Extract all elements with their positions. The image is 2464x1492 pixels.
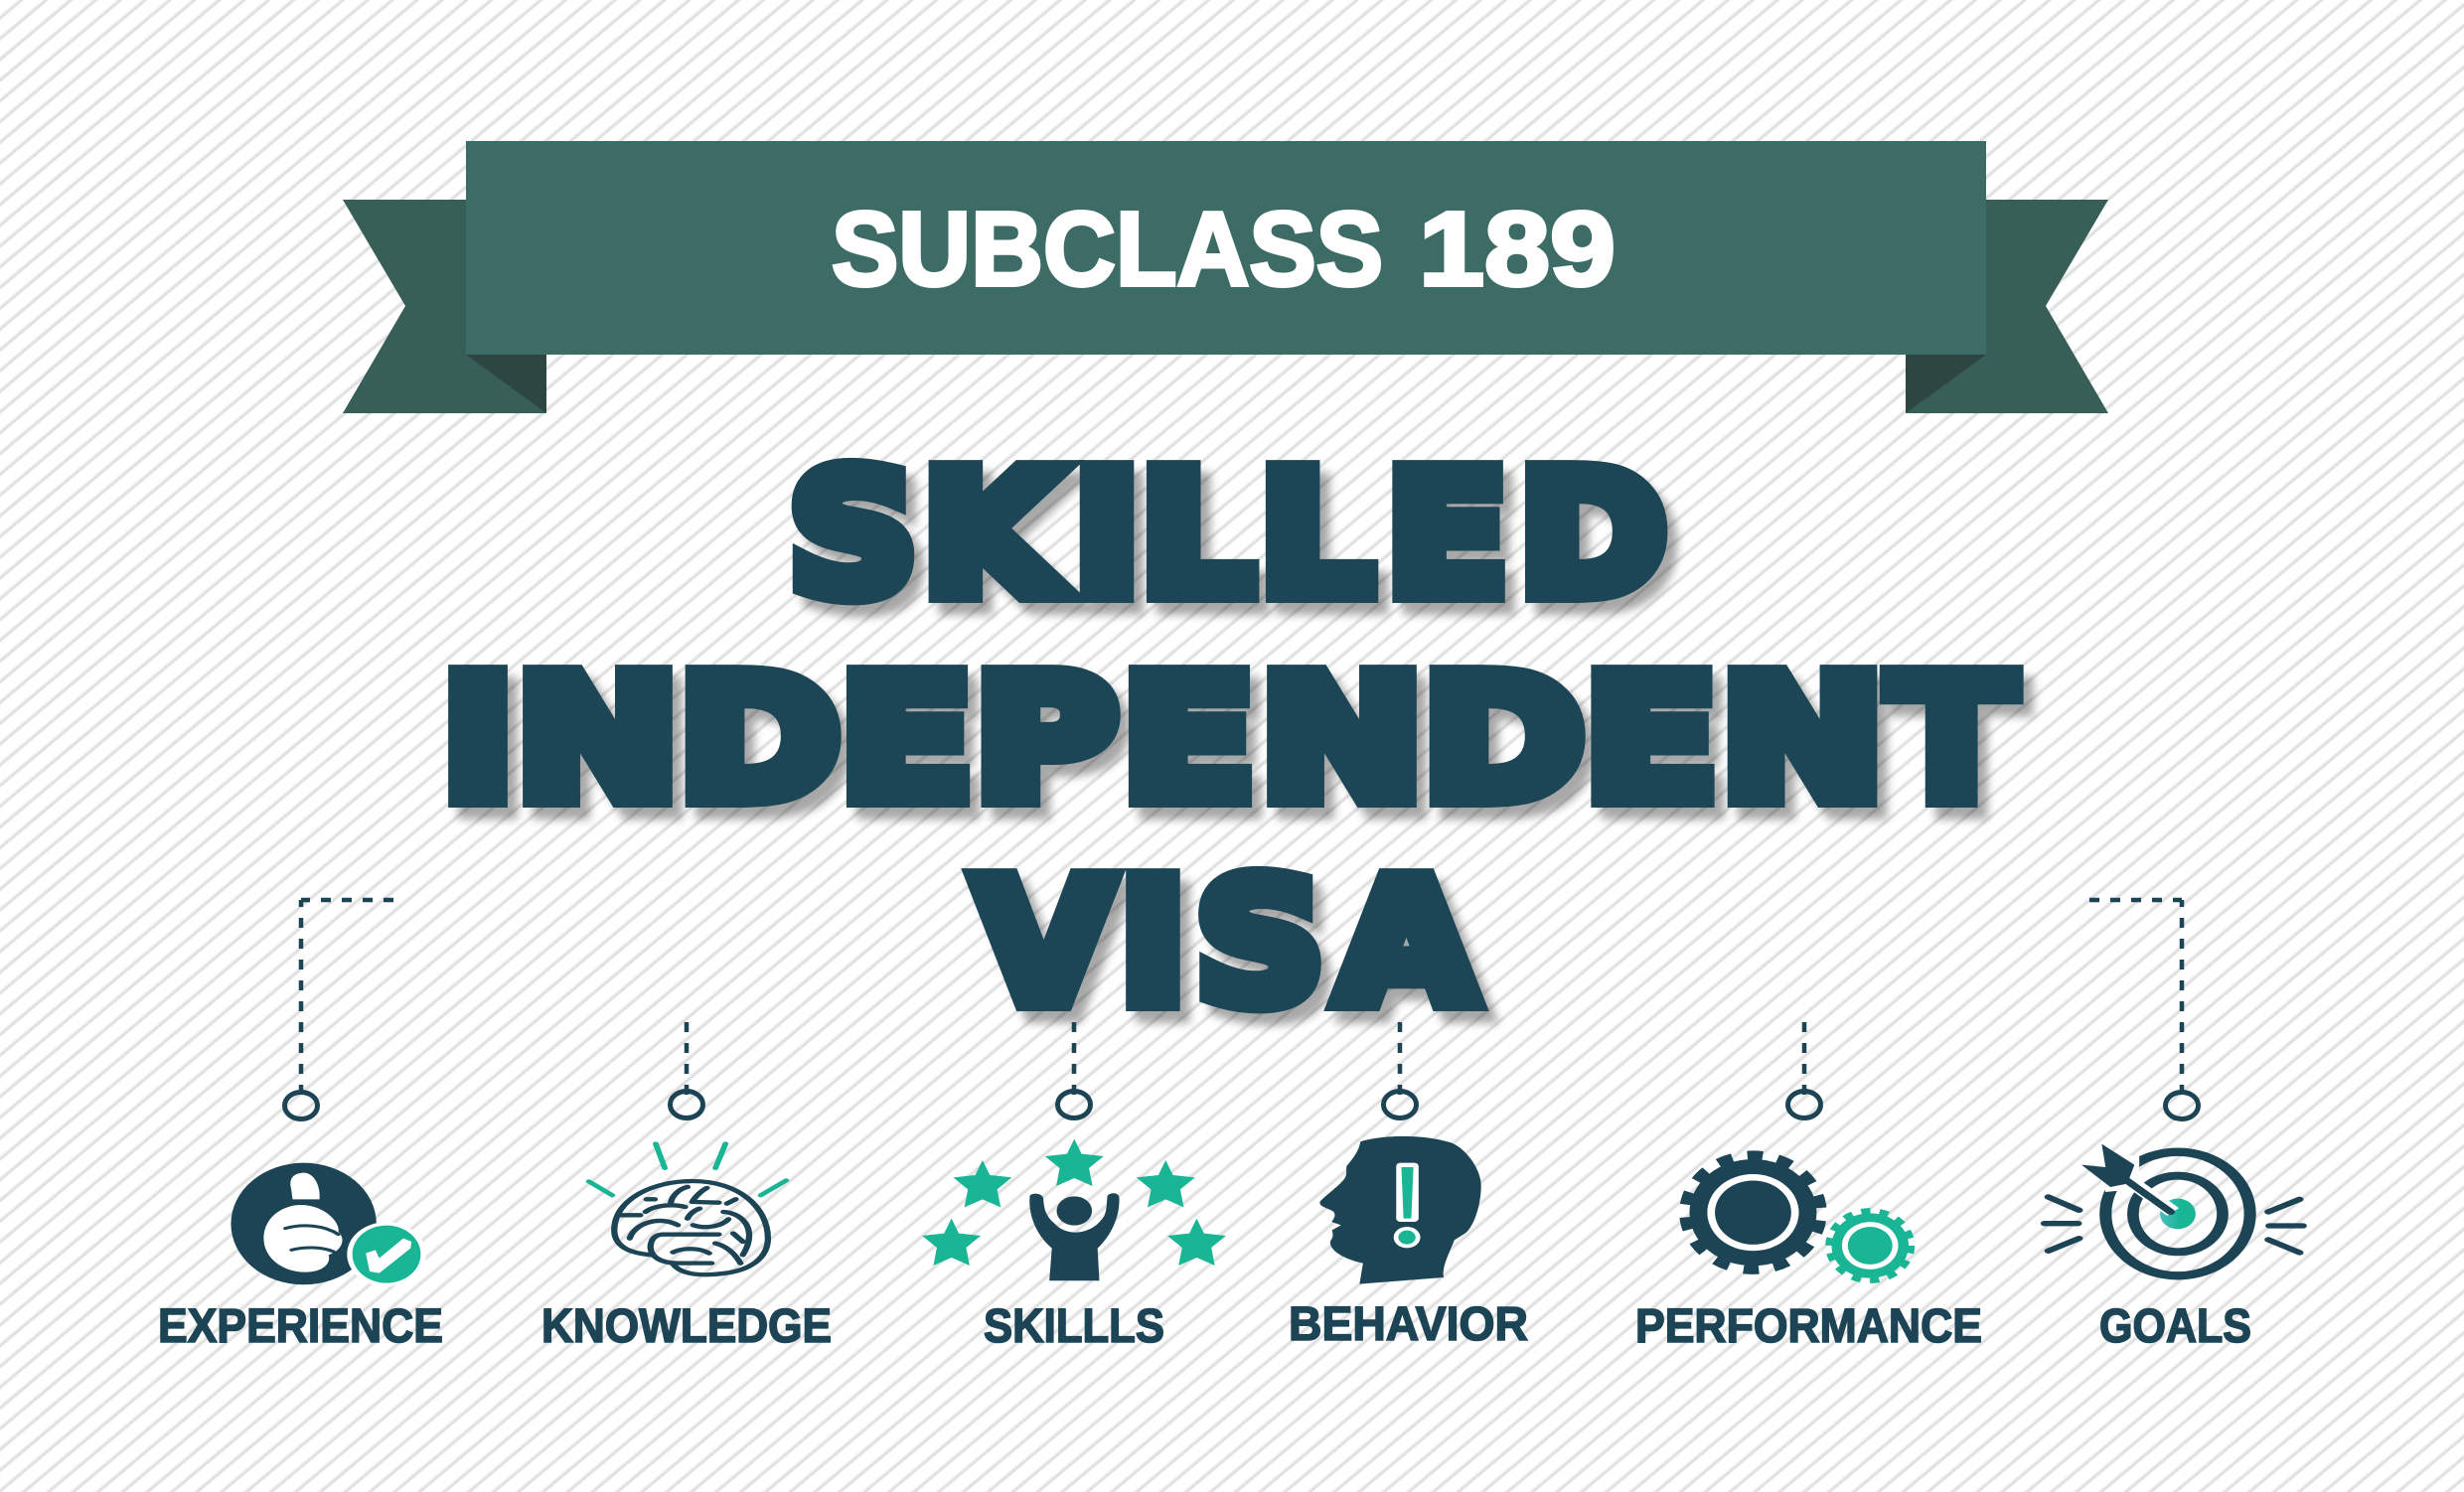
small gear <box>1830 1212 1911 1279</box>
label: behavior: BEHAVIOR <box>1289 1298 1528 1351</box>
ribbon left tail <box>343 200 546 413</box>
icon: thumbs up with check <box>231 1163 426 1286</box>
big gear <box>1676 1148 1830 1276</box>
icon: head with exclamation mark <box>1319 1136 1481 1284</box>
title line: independent: INDEPENDENT <box>442 637 2014 838</box>
ribbon main band <box>466 141 1986 355</box>
connector: goals <box>2089 900 2198 1119</box>
banner text: 189 <box>1419 191 1616 308</box>
banner text: SUBCLASS <box>832 191 1383 308</box>
connector: behavior <box>1383 1021 1417 1119</box>
label: knowledge: KNOWLEDGE <box>541 1300 832 1353</box>
connector: skills <box>1057 1021 1091 1119</box>
connector: experience <box>284 900 393 1119</box>
connector: performance <box>1788 1021 1820 1119</box>
ribbon right tail <box>1906 200 2108 413</box>
label: experience: EXPERIENCE <box>158 1300 443 1353</box>
icon: gears <box>1676 1148 1911 1279</box>
label: skills: SKILLLS <box>984 1300 1164 1353</box>
label: performance: PERFORMANCE <box>1635 1300 1982 1353</box>
title line: visa: VISA <box>975 845 1475 1042</box>
main title <box>442 437 2014 1042</box>
ribbon left fold <box>466 355 546 413</box>
connector: knowledge <box>670 1021 703 1119</box>
ribbon banner <box>343 141 2108 413</box>
label: goals: GOALS <box>2099 1300 2251 1353</box>
ribbon right fold <box>1906 355 1986 413</box>
title line: skilled: SKILLED <box>789 437 1666 634</box>
icon: target with arrow <box>2045 1144 2303 1275</box>
icon: person with stars <box>922 1139 1226 1280</box>
icon: brain with rays <box>589 1143 786 1274</box>
